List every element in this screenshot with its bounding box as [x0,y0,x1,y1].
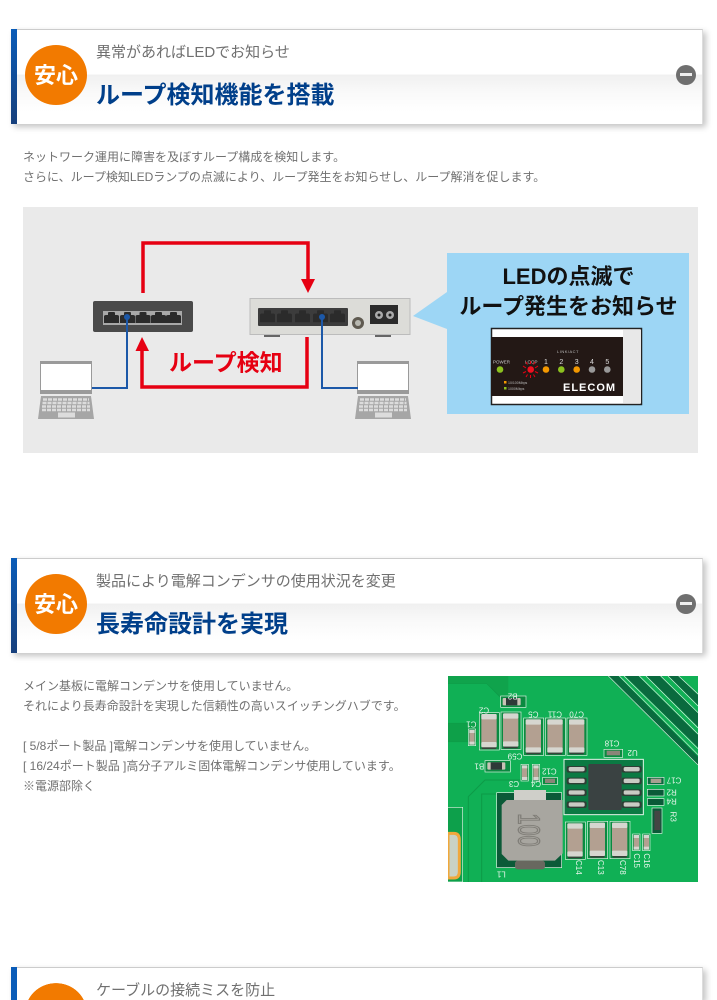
silkscreen labels: B2 [507,691,518,700]
callout: LED blink [413,253,689,414]
red arrow: top loop [143,243,315,293]
text block: capacitor description [23,679,406,793]
text block: loop detection description [23,150,545,184]
capacitors bottom row [565,821,630,859]
header subtitle: ケーブルの接続ミスを防止 [96,982,275,999]
header subtitle: 異常があればLEDでお知らせ [96,44,290,61]
silkscreen labels: R2 [666,787,677,796]
section header: long life design [11,558,703,653]
badge: anshin: 安心 [34,592,78,617]
IC chip [564,759,643,815]
section header: cable misconnection [11,967,703,1000]
icon: collapse minus [676,594,696,614]
red arrow: bottom loop [136,337,307,387]
inductor: 100 [512,813,546,847]
laptop left [38,361,94,419]
silkscreen labels: C12 [541,766,557,775]
silkscreen labels: C5 [528,710,538,719]
white switch hub [250,298,410,337]
silkscreen labels: C4 [530,779,541,788]
text block: capacitor description: [ 5/8ポート製品 ]電解コンデンサを使用していません。 [23,739,316,753]
board base [448,676,698,882]
silkscreen labels: C59 [507,751,522,760]
LED front panel: 10/100Mbps [508,381,528,385]
silkscreen labels: C15 [632,853,641,869]
label: loop detection: ループ検知 [169,350,283,376]
silkscreen labels: C70 [569,710,584,719]
small resistors [468,696,664,851]
silkscreen labels: L1 [496,869,506,878]
silkscreen labels [466,691,681,878]
photo: circuit board [448,676,698,882]
LED front panel: LINK/ACT [557,349,579,354]
inductor [497,790,563,869]
orange component edge [448,807,463,882]
LED front panel: 1 [544,359,548,366]
text block: capacitor description: メイン基板に電解コンデンサを使用していません。 [23,679,298,693]
text block: loop detection description: ネットワーク運用に障害を及ぼすループ構成を検知します。 [23,150,345,164]
header title: ループ検知機能を搭載 [96,82,335,109]
badge: orange circle top edge [25,983,87,1000]
silkscreen labels: C11 [547,710,562,719]
badge: anshin [25,574,87,634]
silkscreen labels: C2 [478,705,489,714]
LED front panel: 1000Mbps [508,387,525,391]
silkscreen labels: U2 [627,748,638,757]
board traces [448,676,698,882]
silkscreen labels: B1 [474,761,484,770]
header subtitle: 製品により電解コンデンサの使用状況を変更 [96,573,396,590]
LED front panel: 3 [575,359,579,366]
LED front panel: 4 [590,359,594,366]
panel background [23,207,698,453]
text block: capacitor description: それにより長寿命設計を実現した信頼性の高いスイッチングハブです。 [23,699,406,713]
dark switch hub [93,301,193,332]
text block: loop detection description: さらに、ループ検知LEDランプの点滅により、ループ発生をお知らせし、ループ解消を促します。 [23,170,545,184]
silkscreen labels: R3 [669,812,678,822]
blue cable left [92,317,127,388]
LED front panel: 2 [559,359,563,366]
LED front panel: LOOP [525,360,538,364]
laptop right [355,361,411,419]
callout text: LEDの点滅で [502,264,635,289]
LED front panel [491,328,642,404]
silkscreen labels: C17 [666,776,681,785]
capacitors top row [479,712,587,755]
silkscreen labels: C14 [574,860,583,875]
text block: capacitor description: ※電源部除く [23,779,95,793]
silkscreen labels: C18 [604,739,619,748]
diagram panel: loop detection [23,207,698,453]
silkscreen labels: C3 [508,779,519,788]
LED front panel: 5 [605,359,609,366]
badge: anshin: 安心 [34,63,78,88]
header title: 長寿命設計を実現 [96,611,288,638]
blue cable right [322,317,358,388]
text block: capacitor description: [ 16/24ポート製品 ]高分子アルミ固体電解コンデンサ使用しています。 [23,759,401,773]
LED front panel: ELECOM [563,382,616,394]
section header: loop detection [11,29,703,124]
LED front panel: POWER [493,360,511,364]
silkscreen labels: C13 [596,860,605,875]
silkscreen labels: C78 [618,860,627,875]
icon: collapse minus [676,65,696,85]
diagonal trace stripes [608,676,698,765]
badge: anshin [25,45,87,105]
silkscreen labels: R4 [666,797,677,806]
silkscreen labels: C1 [466,720,476,729]
silkscreen labels: C16 [642,853,651,869]
callout text: ループ発生をお知らせ [459,294,678,319]
